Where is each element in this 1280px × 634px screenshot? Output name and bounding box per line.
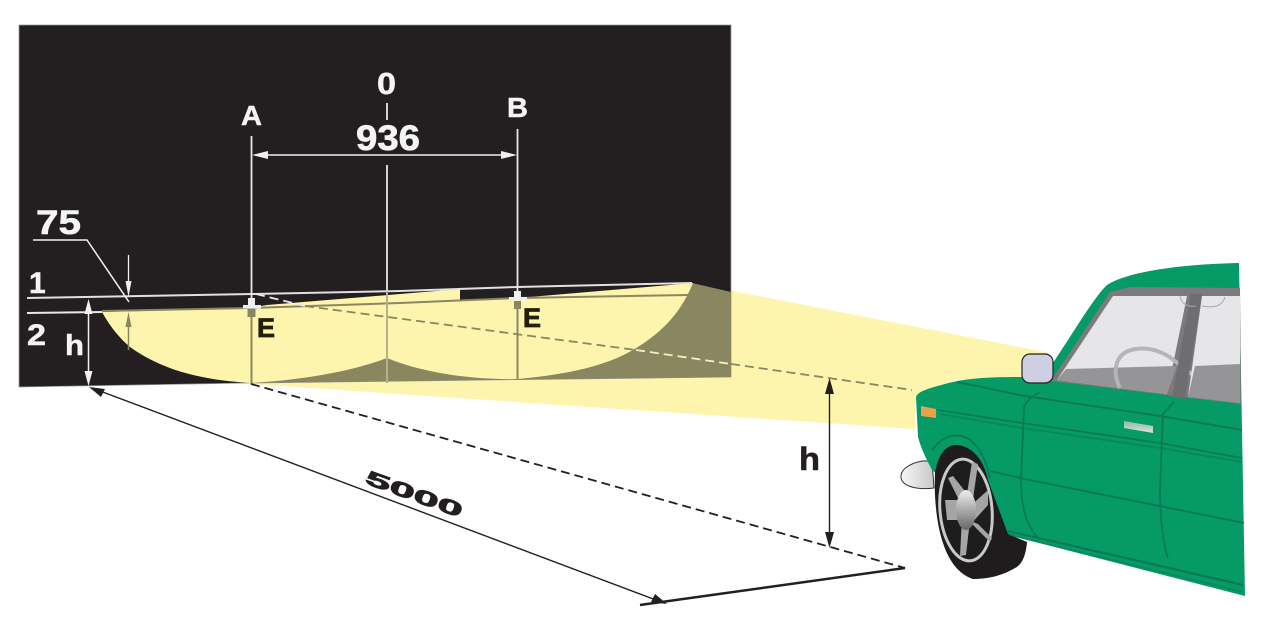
wheel rim xyxy=(936,457,996,563)
vertical line A xyxy=(243,136,261,384)
ground base line xyxy=(640,568,905,605)
dashed optical axis xyxy=(256,294,912,390)
window frame xyxy=(1051,287,1241,404)
label 5000: 5000 xyxy=(362,467,466,523)
door handle xyxy=(1124,421,1153,433)
label h left: h xyxy=(65,330,84,362)
tire xyxy=(935,445,1027,579)
front window xyxy=(1057,296,1187,394)
dashboard xyxy=(1057,366,1177,394)
reference line 2 xyxy=(27,312,102,313)
label 0: 0 xyxy=(377,66,396,101)
arrow 75 lower xyxy=(126,312,132,350)
reference line 1 xyxy=(27,283,692,298)
line 2 olive segment xyxy=(102,295,688,311)
label 1: 1 xyxy=(29,267,46,300)
dimension arrow h right xyxy=(825,378,834,548)
dimension arrow 936 xyxy=(252,151,517,159)
dashed ground line xyxy=(251,384,905,568)
wheel spokes xyxy=(945,462,992,556)
turn indicator xyxy=(921,406,936,418)
label 936: 936 xyxy=(356,119,420,158)
beam pattern on screen xyxy=(102,283,693,383)
label h right: h xyxy=(799,441,820,477)
dimension arrow h left xyxy=(84,299,92,386)
panel: dark screen xyxy=(19,25,731,387)
label E left: E xyxy=(257,313,275,343)
label A: A xyxy=(241,100,262,131)
side mirror xyxy=(1022,354,1053,383)
center line 0 xyxy=(386,103,388,383)
car xyxy=(901,263,1245,596)
vertical line B xyxy=(509,129,527,380)
body lines xyxy=(932,382,1244,592)
beam shadow on screen xyxy=(250,283,731,383)
rear view mirror xyxy=(1180,296,1225,307)
steering wheel xyxy=(1116,349,1204,398)
light beam xyxy=(250,283,1050,429)
rear dashboard xyxy=(1188,364,1240,403)
front bumper xyxy=(901,461,934,489)
arrow 75 upper xyxy=(126,255,132,297)
label E right: E xyxy=(523,303,541,333)
label 2: 2 xyxy=(27,319,46,352)
dimension arrow 5000 xyxy=(89,387,667,604)
label 75: 75 xyxy=(36,204,81,242)
door pillar xyxy=(1172,294,1202,399)
rear window xyxy=(1188,296,1240,400)
car body xyxy=(916,263,1245,596)
leader line 75 xyxy=(33,240,129,302)
wheel hub xyxy=(956,490,976,530)
label B: B xyxy=(507,92,528,123)
